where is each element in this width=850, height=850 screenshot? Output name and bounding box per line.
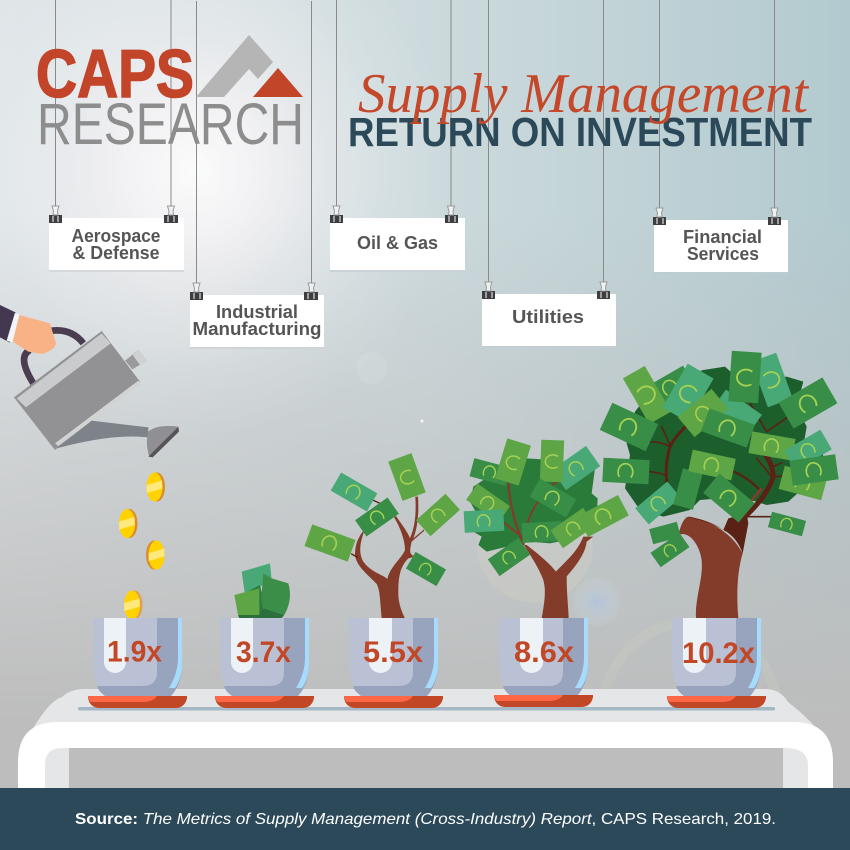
coin 1 [146,472,165,502]
logo: CAPS Research: CAPS [36,36,194,112]
pot: Aerospace & Defense 1.9x [88,618,187,708]
pot: Utilities 8.6x: 8.6x [514,636,574,669]
label card: Oil & Gas [330,218,465,272]
tree: Financial Services [600,351,839,618]
sprout: Industrial Manufacturing [234,563,290,619]
label card: Industrial Manufacturing [190,295,324,349]
label card: Utilities: Utilities [512,307,584,327]
label card: Industrial Manufacturing: Industrial [216,302,298,322]
coin 4 [124,590,142,620]
label card: Financial Services: Financial [683,227,762,247]
label card: Aerospace & Defense: & Defense [72,243,160,263]
strings [56,0,774,283]
label card: Aerospace & Defense: Aerospace [72,226,160,246]
pot: Financial Services 10.2x: 10.2x [682,637,755,670]
label card: Oil & Gas: Oil & Gas [357,233,438,253]
label card: Financial Services [654,220,788,274]
table [18,689,833,788]
logo: CAPS Research: RESEARCH [37,92,304,157]
tree: Oil & Gas [304,453,460,618]
label card: Utilities [482,294,616,348]
title [348,63,812,155]
pot: Oil & Gas 5.5x: 5.5x [363,636,423,669]
icon: hand with watering can [0,305,179,457]
pot: Industrial Manufacturing 3.7x [215,618,314,708]
title: Supply Management [358,63,809,125]
pot: Utilities 8.6x [494,618,593,707]
pot: Industrial Manufacturing 3.7x: 3.7x [236,636,291,669]
pot: Aerospace & Defense 1.9x: 1.9x [107,636,162,668]
label card: Aerospace & Defense [49,218,184,272]
binder clips [49,206,781,300]
source text: Source: The Metrics of Supply Management (Cross-Industry) Report , CAPS Research, 2019. [75,811,776,828]
label card: Industrial Manufacturing: Manufacturing [192,319,322,339]
coin 3 [146,540,164,570]
footer band [0,788,850,850]
tree: Utilities [464,438,629,618]
logo: CAPS Research [36,35,304,157]
pot: Oil & Gas 5.5x [344,618,443,708]
label card: Financial Services: Services [687,244,759,264]
coin 2 [119,509,138,538]
pot: Financial Services 10.2x [667,618,766,708]
